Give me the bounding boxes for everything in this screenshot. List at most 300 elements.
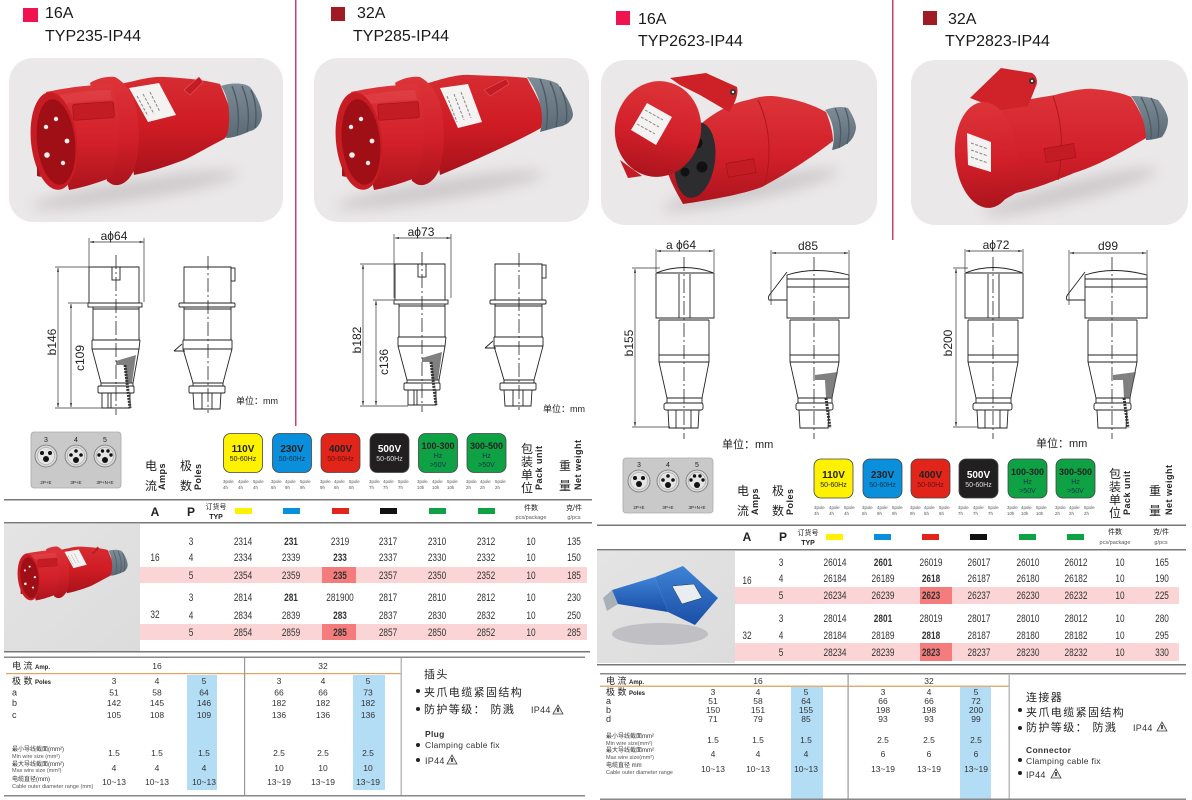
data values: 99 — [971, 714, 981, 724]
voltage button 110V: 110V — [822, 470, 845, 481]
sub-header: 件数 — [1108, 527, 1122, 536]
rows: connector order numbers: 2801 — [874, 613, 893, 625]
header: net weight: 重 — [559, 459, 571, 473]
data values: 198 — [922, 705, 936, 715]
data values: 105 — [107, 710, 121, 720]
dimension b: b146 — [45, 328, 59, 355]
rows: plug order numbers: 2812 — [477, 592, 495, 604]
data values: 150 — [706, 705, 720, 715]
row labels: 最小导线截面(mm²) — [12, 745, 64, 753]
rows: connector order numbers: 10 — [1115, 647, 1125, 659]
voltage button 400V: 50-60Hz — [917, 482, 944, 489]
rows: connector order numbers: 10 — [1115, 557, 1125, 569]
rows: plug order numbers: 2354 — [234, 570, 253, 582]
pole hour labels: 7h — [973, 511, 978, 516]
data values: 66 — [924, 696, 934, 706]
pole hour labels: 4pole — [829, 505, 840, 510]
data values: 146 — [197, 698, 211, 708]
data values — [701, 687, 988, 774]
header: poles: Poles — [193, 463, 203, 490]
data values: 93 — [924, 714, 934, 724]
header: net weight: Net weight — [1164, 464, 1174, 515]
voltage button 500V: 500V — [967, 470, 991, 481]
rows: plug order numbers: 5 — [189, 627, 193, 639]
rows: connector order numbers: 28180 — [1017, 630, 1040, 642]
data values: 4 — [756, 749, 761, 759]
pole hour labels: 4pole — [973, 505, 984, 510]
technical drawing: TYP285 — [350, 225, 585, 414]
data values: 1.5 — [198, 748, 210, 758]
icon: 16A colour square — [23, 8, 38, 22]
rows: plug order numbers: 2337 — [379, 552, 397, 564]
data values: 2.5 — [970, 735, 982, 745]
voltage button 500V: 50-60Hz — [965, 482, 992, 489]
header: poles: 数 — [180, 478, 192, 493]
dimension a: aϕ64 — [101, 229, 128, 243]
rows: connector order numbers: 28230 — [1017, 647, 1040, 659]
rows: connector order numbers: 16 — [742, 575, 752, 587]
amp header row: 电 流 Amp. — [12, 660, 50, 671]
data values: 4 — [112, 763, 117, 773]
features: plug: 夹爪电缆紧固结构 — [424, 685, 523, 699]
voltage button 100-300 — [418, 434, 458, 472]
rows: plug order numbers: 5 — [189, 570, 193, 582]
data values: 108 — [150, 710, 164, 720]
row labels: 极 数 Poles — [606, 686, 646, 697]
sub-header: 克/件 — [1153, 527, 1169, 536]
pin layout box: 2P+E — [40, 480, 52, 485]
features: plug: IP44 — [531, 705, 551, 715]
table: connector ordering — [597, 458, 1186, 666]
rows: connector order numbers: 280 — [1155, 613, 1169, 625]
pole hour labels: 3pole — [1007, 505, 1018, 510]
features: connector: Connector — [1026, 745, 1072, 755]
rows: connector order numbers — [742, 557, 1169, 659]
pole hour labels: 5pole — [1036, 505, 1047, 510]
pole hour labels: 5pole — [892, 505, 903, 510]
dimension c: c109 — [73, 345, 87, 371]
features: connector: IP44 — [1026, 770, 1046, 780]
product thumbnail: blue connector — [597, 551, 735, 663]
voltage button 110V: 110V — [232, 444, 255, 455]
rows: plug order numbers: 2810 — [428, 592, 447, 604]
data values: 198 — [876, 705, 890, 715]
row labels: Min wire size (mm²) — [12, 754, 60, 760]
pole hour labels: 7h — [988, 511, 993, 516]
rows: plug order numbers: 281 — [284, 592, 298, 604]
technical drawing: TYP235 — [45, 229, 278, 415]
voltage button 100-300: 100-300 — [421, 441, 455, 451]
data values: 3 — [881, 687, 886, 697]
rows: plug order numbers: 2834 — [234, 610, 253, 622]
data values: 3 — [112, 676, 117, 686]
dimension b — [941, 268, 978, 427]
rows: plug order numbers: 2359 — [282, 570, 300, 582]
data values: 155 — [799, 705, 813, 715]
pole hour labels: 4h — [223, 485, 228, 490]
rows: plug order numbers: 3 — [189, 592, 193, 604]
data values: 1.5 — [752, 735, 764, 745]
pin layout box: 3P+E — [70, 480, 82, 485]
rows: plug order numbers: 235 — [333, 570, 347, 582]
rows: connector order numbers: 10 — [1115, 613, 1125, 625]
pole hour labels: 2h — [1084, 511, 1089, 516]
unit note: 单位：mm — [543, 403, 585, 414]
dimension c: c136 — [377, 349, 391, 375]
data values: 10~13 — [145, 777, 169, 787]
pin layout box: 5 — [695, 462, 699, 469]
data values: 4 — [155, 763, 160, 773]
rows: connector order numbers: 10 — [1115, 630, 1125, 642]
rows: connector order numbers: 26234 — [824, 590, 847, 602]
rows: plug order numbers: 10 — [526, 536, 536, 548]
data values: 13~19 — [356, 777, 380, 787]
pole hour labels: 9h — [910, 511, 915, 516]
header: pack unit: 单 — [521, 468, 533, 482]
pole hour labels: 5pole — [495, 479, 506, 484]
rows: plug order numbers: 10 — [526, 570, 536, 582]
rows: plug order numbers: 16 — [150, 552, 160, 564]
pole hour labels: 7h — [383, 485, 388, 490]
row labels: 电缆直径(mm) — [12, 775, 50, 783]
pole hour labels: 4pole — [238, 479, 249, 484]
row labels: c — [12, 710, 17, 720]
rows: connector order numbers: 330 — [1155, 647, 1169, 659]
features: connector — [1018, 691, 1167, 780]
rows: plug order numbers: 285 — [333, 627, 347, 639]
pole hour labels: 7h — [958, 511, 963, 516]
data values — [102, 676, 380, 787]
row labels — [12, 675, 93, 790]
data values: 10~13 — [701, 764, 725, 774]
pin layout box: 4 — [74, 437, 78, 444]
dimension a — [656, 238, 714, 272]
voltage button 100-300 — [1008, 459, 1047, 498]
dimension d — [1069, 239, 1147, 305]
sub-header: TYP — [209, 514, 223, 521]
pole hour labels: 3pole — [271, 479, 282, 484]
voltage button 300-500: 300-500 — [470, 441, 503, 451]
data values: 2.5 — [317, 748, 329, 758]
photo panel: 16A plug — [9, 58, 283, 222]
dimension b: b182 — [350, 326, 364, 353]
features: connector: 夹爪电缆紧固结构 — [1026, 705, 1125, 719]
rows: connector order numbers: 10 — [1115, 590, 1125, 602]
rows: connector order numbers: 26232 — [1065, 590, 1087, 602]
rows: connector order numbers: 4 — [779, 573, 784, 585]
data values: 6 — [881, 749, 886, 759]
data values: 79 — [753, 714, 763, 724]
voltage button 230V — [272, 434, 312, 472]
rows: connector order numbers: 26014 — [824, 557, 847, 569]
pin layout box: 3P+E — [662, 505, 674, 510]
rating 32A: 32A — [357, 5, 386, 22]
data values: 73 — [363, 688, 373, 698]
row labels: Max wire size(mm²) — [606, 755, 654, 761]
row labels: Cable outer diameter range (mm) — [12, 784, 93, 790]
pole hour labels: 6h — [334, 485, 339, 490]
header: pack unit: Pack unit — [534, 445, 544, 490]
row labels: 极 数 Poles — [12, 675, 52, 686]
features: connector: IP44 — [1133, 723, 1153, 733]
panel divider left — [295, 0, 296, 426]
rows: plug order numbers: 2350 — [428, 570, 447, 582]
header: net weight: 量 — [1149, 504, 1161, 518]
pole hour labels: 5pole — [253, 479, 264, 484]
pole hour labels: 9h — [300, 485, 305, 490]
sub-header: 订货号 — [798, 528, 818, 537]
rows: connector order numbers: 295 — [1155, 630, 1169, 642]
unit note: 单位：mm — [1036, 436, 1087, 450]
rows: plug order numbers: 4 — [189, 552, 194, 564]
pole hour labels: 5pole — [300, 479, 311, 484]
header: pack unit: Pack unit — [1122, 470, 1132, 515]
header: poles: 数 — [772, 503, 784, 518]
voltage button 100-300: Hz — [1023, 479, 1032, 486]
rows: connector order numbers: 165 — [1155, 557, 1169, 569]
header: net weight: 重 — [1149, 484, 1161, 498]
pole hour labels: 4h — [829, 511, 834, 516]
data values: 66 — [274, 688, 284, 698]
data values: 4 — [711, 749, 716, 759]
rows: plug order numbers: 32 — [150, 609, 160, 621]
pole hour labels: 2h — [495, 485, 500, 490]
header: pack unit: 单 — [1109, 493, 1121, 507]
sub-header: A — [151, 505, 160, 519]
data values: 145 — [150, 698, 164, 708]
features: connector: 防护等级： 防溅 — [1026, 720, 1117, 734]
pole hour labels: 10h — [1007, 511, 1015, 516]
row labels: a — [606, 696, 611, 706]
data values: 72 — [971, 696, 981, 706]
pole hour labels: 5pole — [1084, 505, 1095, 510]
pole hour labels: 10h — [432, 485, 440, 490]
rows: connector order numbers: 26187 — [968, 573, 990, 585]
header: pack unit: 位 — [1109, 505, 1121, 520]
rows: connector order numbers: 26012 — [1065, 557, 1087, 569]
rows: connector order numbers: 28014 — [824, 613, 847, 625]
pole hour labels: 4pole — [1021, 505, 1032, 510]
pole hour labels: 5pole — [349, 479, 360, 484]
pin layout box: 3 — [44, 437, 48, 444]
rows: plug order numbers: 3 — [189, 536, 193, 548]
header: pack unit — [521, 442, 544, 495]
row labels: d — [606, 714, 611, 724]
product thumbnail: red plug — [4, 524, 140, 651]
dimension a: a ϕ64 — [666, 238, 696, 252]
dimension b — [45, 267, 102, 408]
pole hour labels: 3pole — [369, 479, 380, 484]
data values: 136 — [361, 710, 375, 720]
voltage button 100-300: >50V — [1019, 488, 1036, 495]
pole hour labels: 3pole — [466, 479, 477, 484]
row labels: Cable outer diameter range — [606, 770, 673, 776]
rows: plug order numbers: 2310 — [428, 536, 447, 548]
header: pack unit: 包 — [1109, 467, 1121, 481]
rows: plug order numbers: 2330 — [428, 552, 447, 564]
features: plug: IP44 — [425, 756, 445, 766]
rows: connector order numbers: 28017 — [968, 613, 990, 625]
data values: 6 — [927, 749, 932, 759]
rows: connector order numbers: 26019 — [920, 557, 942, 569]
pole hour labels: 5pole — [939, 505, 950, 510]
rows: plug order numbers: 2357 — [379, 570, 397, 582]
pole hour labels: 3pole — [320, 479, 331, 484]
pole hour labels: 6h — [862, 511, 867, 516]
rows: connector order numbers: 10 — [1115, 573, 1125, 585]
rows: connector order numbers: 2618 — [922, 573, 941, 585]
rows: connector order numbers: 28237 — [968, 647, 990, 659]
header: pack unit: 包 — [521, 442, 533, 456]
highlight stripes — [735, 587, 1179, 661]
amp header row — [12, 660, 328, 671]
data values: 13~19 — [311, 777, 335, 787]
data values: 1.5 — [108, 748, 120, 758]
pole hour labels: 9h — [320, 485, 325, 490]
header: amps: 电 — [145, 459, 157, 473]
pole hour labels: 4h — [253, 485, 258, 490]
rows: plug order numbers: 281900 — [326, 592, 354, 604]
rows: connector order numbers: 5 — [779, 590, 783, 602]
rows: plug order numbers: 2332 — [477, 552, 495, 564]
pole hour labels: 9h — [892, 511, 897, 516]
data values: 10 — [363, 763, 373, 773]
rows: connector order numbers: 26237 — [968, 590, 990, 602]
data values: 109 — [197, 710, 211, 720]
rows: connector order numbers: 26180 — [1017, 573, 1040, 585]
voltage button 400V — [321, 434, 360, 472]
voltage button 230V: 50-60Hz — [869, 482, 896, 489]
data values: 5 — [202, 676, 207, 686]
data values: 182 — [361, 698, 375, 708]
pole hour labels — [223, 479, 506, 490]
panel: TYP235 plug heading — [23, 5, 141, 45]
pole hour labels: 6h — [939, 511, 944, 516]
pole hour labels: 5pole — [447, 479, 458, 484]
dimension b: b155 — [622, 329, 636, 356]
voltage button 500V: 500V — [378, 444, 402, 455]
dimension c — [68, 303, 90, 407]
rows: plug order numbers: 283 — [333, 610, 347, 622]
features: plug: 插头 — [424, 667, 449, 681]
data values: 13~19 — [267, 777, 291, 787]
data values: 10~13 — [794, 764, 818, 774]
voltage button 110V: 50-60Hz — [820, 482, 847, 489]
data values: 2.5 — [273, 748, 285, 758]
pole hour labels: 9h — [285, 485, 290, 490]
amp header row: 16 — [152, 661, 162, 671]
panel: TYP285 plug heading — [331, 5, 449, 45]
rows: plug order numbers: 2814 — [234, 592, 253, 604]
features: connector: 连接器 — [1026, 691, 1063, 704]
data values: 4 — [155, 676, 160, 686]
rows: connector order numbers: 28019 — [920, 613, 942, 625]
voltage button 500V: 50-60Hz — [376, 456, 403, 463]
sub-header: 订货号 — [206, 502, 226, 511]
pole hour labels: 5pole — [844, 505, 855, 510]
data values: 13~19 — [964, 764, 988, 774]
rows: connector order numbers: 28010 — [1017, 613, 1040, 625]
sub-header: pcs/package — [1100, 540, 1130, 546]
rows: connector order numbers: 225 — [1155, 590, 1169, 602]
rows: plug order numbers: 2312 — [477, 536, 495, 548]
row labels: b — [12, 698, 17, 708]
data values: 4 — [321, 676, 326, 686]
row labels: b — [606, 705, 611, 715]
data values: 10 — [274, 763, 284, 773]
header: poles — [772, 484, 795, 518]
header: pack unit: 装 — [521, 455, 533, 469]
data values: 71 — [708, 714, 718, 724]
highlight stripes — [140, 567, 587, 640]
rows: plug order numbers: 2339 — [282, 552, 300, 564]
voltage button 300-500: Hz — [482, 453, 491, 460]
pole hour labels: 6h — [271, 485, 276, 490]
header: pack unit: 位 — [521, 480, 533, 495]
pole hour labels: 6h — [349, 485, 354, 490]
data values: 66 — [318, 688, 328, 698]
rows: plug order numbers: 135 — [567, 536, 581, 548]
voltage button 110V — [224, 434, 262, 472]
rows: plug order numbers: 231 — [284, 536, 298, 548]
pin layout box: 2P+E — [633, 505, 645, 510]
header: amps: 流 — [145, 479, 157, 493]
photo panel: 32A connector — [911, 60, 1188, 225]
rows: connector order numbers: 26189 — [872, 573, 894, 585]
row labels: 最大导线截面(mm²) — [12, 760, 64, 768]
sub-header: g/pcs — [567, 515, 581, 521]
rows: plug order numbers: 2352 — [477, 570, 495, 582]
rating 32A: 32A — [948, 11, 977, 28]
data values: 142 — [107, 698, 121, 708]
pole hour labels: 3pole — [910, 505, 921, 510]
sub-header — [151, 502, 582, 521]
sub-header: g/pcs — [1154, 540, 1168, 546]
model name: TYP2623-IP44 — [638, 33, 743, 50]
dimension a — [89, 229, 144, 302]
pole hour labels: 4h — [844, 511, 849, 516]
data values: 51 — [708, 696, 718, 706]
pin layout box: 3P+N+E — [688, 505, 706, 510]
data values: 10~13 — [102, 777, 126, 787]
table: plug ordering — [4, 432, 592, 652]
sub-header: 件数 — [524, 503, 538, 512]
row labels: a — [12, 688, 17, 698]
pole hour labels: 5pole — [398, 479, 409, 484]
data values: 3 — [711, 687, 716, 697]
model name: TYP2823-IP44 — [945, 33, 1050, 50]
pole hour labels: 3pole — [958, 505, 969, 510]
data values: 4 — [804, 749, 809, 759]
pole hour labels: 4pole — [432, 479, 443, 484]
rows: plug order numbers: 2839 — [282, 610, 300, 622]
unit note: 单位：mm — [236, 395, 278, 406]
icon: 32A colour square — [331, 7, 345, 21]
table: plug dimensions — [4, 656, 585, 796]
dimension d — [771, 239, 849, 305]
rows: plug order numbers: 285 — [567, 627, 581, 639]
rows: plug order numbers: 185 — [567, 570, 581, 582]
photo panel: 32A plug — [314, 58, 589, 222]
rows: plug order numbers: 2850 — [428, 627, 447, 639]
pole hour labels: 10h — [447, 485, 455, 490]
unit note: 单位：mm — [722, 437, 773, 451]
pole hour labels: 3pole — [417, 479, 428, 484]
panel divider right — [892, 0, 894, 240]
rows: plug order numbers: 2837 — [379, 610, 397, 622]
dimension c — [373, 300, 396, 405]
row labels: Max wire size (mm²) — [12, 768, 62, 774]
